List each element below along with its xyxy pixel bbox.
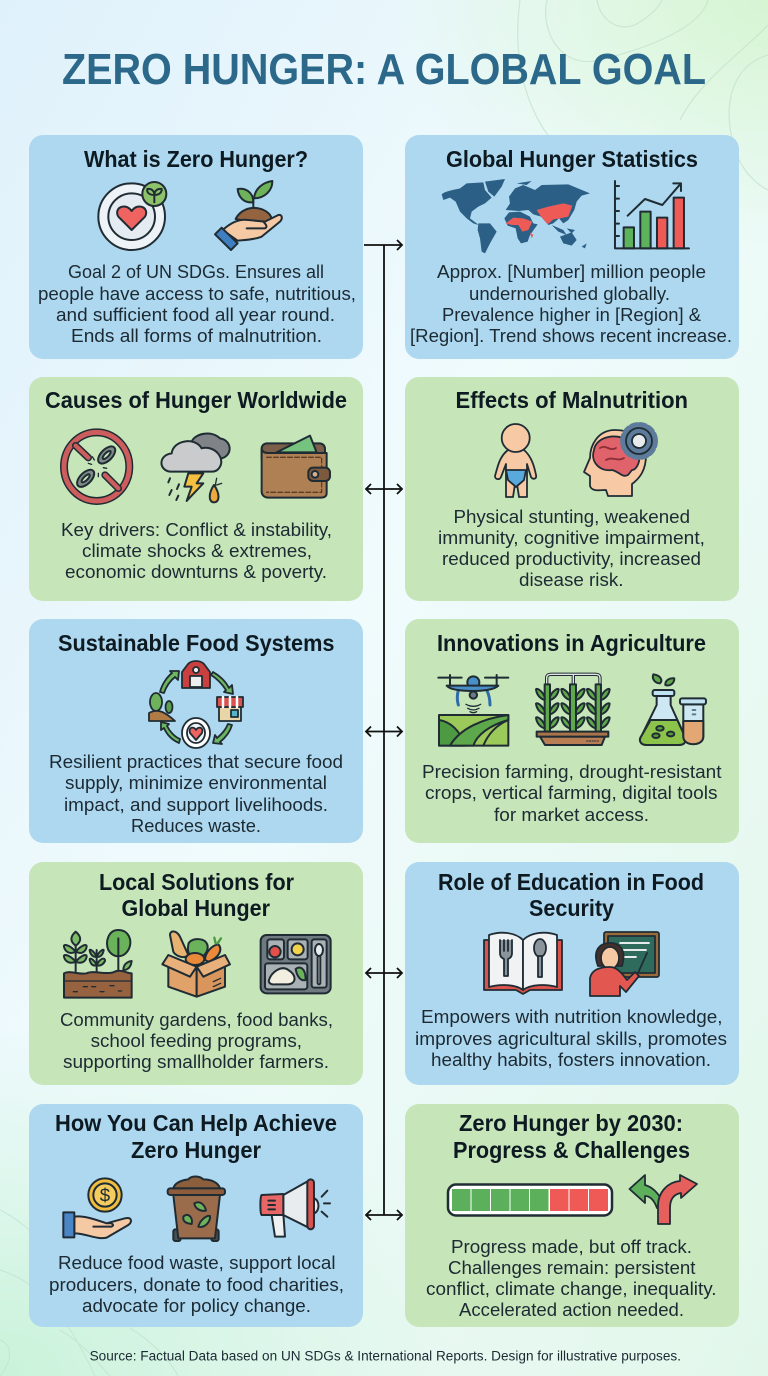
heading: What is Zero Hunger? bbox=[84, 146, 308, 172]
heading: Security bbox=[529, 895, 614, 921]
heading: Innovations in Agriculture bbox=[437, 630, 706, 656]
icon: hand holding seedling bbox=[215, 181, 282, 250]
body text: producers, donate to food charities, bbox=[49, 1274, 344, 1295]
panel: Zero Hunger by 2030 bbox=[405, 1104, 739, 1327]
icon: wallet bbox=[262, 436, 330, 498]
body text: Precision farming, drought-resistant bbox=[422, 761, 722, 782]
panel: Effects of Malnutrition bbox=[405, 377, 739, 601]
body text bbox=[38, 261, 356, 346]
icon: hand with coin bbox=[63, 1178, 131, 1238]
body text bbox=[49, 1252, 344, 1316]
body text: advocate for policy change. bbox=[82, 1295, 311, 1316]
body text: Physical stunting, weakened bbox=[454, 506, 690, 527]
body text: supporting smallholder farmers. bbox=[63, 1051, 329, 1072]
icon: teacher at chalkboard bbox=[590, 932, 659, 996]
body text: Goal 2 of UN SDGs. Ensures all bbox=[68, 261, 324, 282]
icon: food system cycle bbox=[149, 661, 243, 748]
body text bbox=[438, 506, 705, 590]
icon: vertical farm bbox=[536, 674, 610, 745]
heading: How You Can Help Achieve bbox=[55, 1110, 337, 1136]
body text bbox=[61, 519, 332, 582]
icon: bar chart with trend arrow bbox=[615, 181, 689, 248]
panel: Causes of Hunger Worldwide bbox=[29, 377, 363, 601]
panel: Global Hunger Statistics bbox=[405, 135, 739, 359]
heading: Progress & Challenges bbox=[453, 1137, 690, 1163]
body text: impact, and support livelihoods. bbox=[64, 794, 328, 815]
body text bbox=[415, 1006, 727, 1070]
heading: Role of Education in Food bbox=[438, 869, 704, 895]
body text: people have access to safe, nutritious, bbox=[38, 283, 356, 304]
body text bbox=[49, 751, 343, 836]
body text bbox=[60, 1009, 333, 1072]
heading bbox=[55, 1110, 337, 1163]
heading: Global Hunger bbox=[122, 895, 270, 921]
icon: hand with coin: $ bbox=[100, 1185, 111, 1206]
source footer: Source: Factual Data based on UN SDGs & International Reports. Design for illustrative purposes. bbox=[90, 1348, 681, 1364]
body text bbox=[410, 261, 732, 346]
body text: crops, vertical farming, digital tools bbox=[425, 782, 718, 803]
body text: school feeding programs, bbox=[91, 1030, 302, 1051]
body text: healthy habits, fosters innovation. bbox=[431, 1049, 711, 1070]
icon: world map bbox=[442, 179, 590, 253]
body text: Ends all forms of malnutrition. bbox=[71, 325, 322, 346]
icon: plate with heart bbox=[98, 182, 166, 250]
body text: and sufficient food all year round. bbox=[56, 304, 335, 325]
panel: Local Solutions for Global Hunger bbox=[29, 862, 363, 1085]
panel: Role of Education in Food Security bbox=[405, 862, 739, 1085]
icon: child bbox=[495, 424, 536, 497]
icon: food box bbox=[162, 931, 230, 997]
connector arrows bbox=[364, 240, 402, 1220]
heading: Local Solutions for bbox=[99, 869, 294, 895]
body text: for market access. bbox=[494, 804, 649, 825]
panel: Sustainable Food Systems bbox=[29, 619, 363, 843]
heading: Zero Hunger by 2030: bbox=[459, 1110, 683, 1136]
icon: school meal tray bbox=[261, 935, 331, 993]
panel: How You Can Help bbox=[29, 1104, 363, 1327]
icon: progress bar bbox=[448, 1184, 612, 1216]
body text: Reduce food waste, support local bbox=[58, 1252, 336, 1273]
heading bbox=[438, 869, 704, 921]
body text: disease risk. bbox=[519, 569, 624, 590]
panel: Innovations in Agriculture bbox=[405, 619, 739, 843]
heading: Effects of Malnutrition bbox=[456, 387, 688, 413]
icon: lab flask and test tube bbox=[640, 674, 706, 745]
body text: economic downturns & poverty. bbox=[65, 561, 327, 582]
body text: Community gardens, food banks, bbox=[60, 1009, 333, 1030]
body text: Empowers with nutrition knowledge, bbox=[421, 1006, 722, 1027]
heading: Sustainable Food Systems bbox=[58, 630, 334, 656]
icon: book with fork and spoon bbox=[484, 933, 562, 994]
body text bbox=[426, 1236, 716, 1320]
icon: storm cloud bbox=[161, 434, 230, 502]
icon: compost bin bbox=[168, 1176, 225, 1241]
title: ZERO HUNGER: A GLOBAL GOAL bbox=[62, 45, 706, 94]
heading: Causes of Hunger Worldwide bbox=[45, 387, 347, 413]
icon: diverging arrows bbox=[630, 1175, 697, 1224]
heading bbox=[453, 1110, 690, 1163]
heading bbox=[99, 869, 294, 921]
body text: improves agricultural skills, promotes bbox=[415, 1028, 727, 1049]
body text: Challenges remain: persistent bbox=[448, 1257, 696, 1278]
body text: supply, minimize environmental bbox=[65, 772, 327, 793]
body text: conflict, climate change, inequality. bbox=[426, 1278, 716, 1299]
heading: Global Hunger Statistics bbox=[446, 146, 698, 172]
icon: drone over field bbox=[438, 675, 508, 746]
body text: undernourished globally. bbox=[469, 283, 670, 304]
icon: broken chain prohibited bbox=[64, 432, 129, 501]
body text: Reduces waste. bbox=[131, 815, 261, 836]
body text: reduced productivity, increased bbox=[442, 548, 701, 569]
body text: Accelerated action needed. bbox=[459, 1299, 684, 1320]
body text: Resilient practices that secure food bbox=[49, 751, 343, 772]
icon: community garden bbox=[64, 930, 132, 998]
body text: climate shocks & extremes, bbox=[82, 540, 312, 561]
body text bbox=[422, 761, 722, 825]
heading: Zero Hunger bbox=[131, 1137, 261, 1163]
icon: head with brain and gear bbox=[584, 425, 655, 496]
body text: Progress made, but off track. bbox=[451, 1236, 692, 1257]
icon: megaphone bbox=[260, 1179, 330, 1237]
body text: Key drivers: Conflict & instability, bbox=[61, 519, 332, 540]
body text: Approx. [Number] million people bbox=[437, 261, 706, 282]
body text: [Region]. Trend shows recent increase. bbox=[410, 325, 732, 346]
panel: What is Zero Hunger bbox=[29, 135, 363, 359]
body text: Prevalence higher in [Region] & bbox=[442, 304, 701, 325]
body text: immunity, cognitive impairment, bbox=[438, 527, 705, 548]
